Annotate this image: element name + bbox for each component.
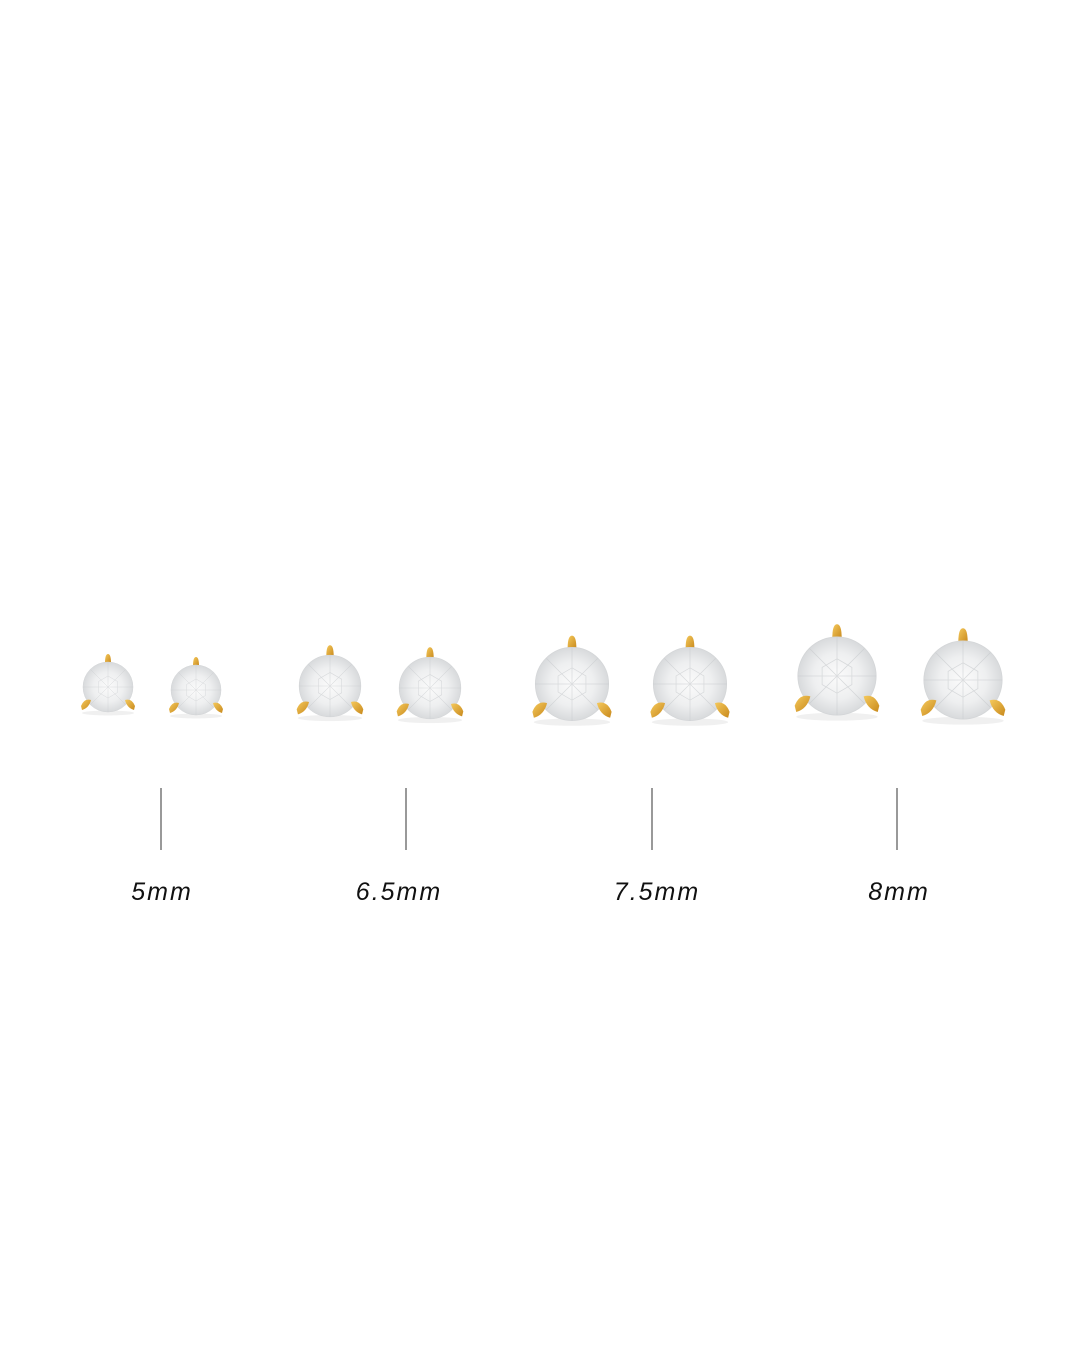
label: 7.5mm: 7.5mm bbox=[614, 878, 700, 906]
label: 5mm: 5mm bbox=[131, 878, 193, 906]
marker line: 6.5mm bbox=[405, 788, 407, 850]
label: 8mm: 8mm bbox=[868, 878, 930, 906]
earrings: 8mm bbox=[795, 624, 1005, 725]
marker line: 8mm bbox=[896, 788, 898, 850]
marker line: 7.5mm bbox=[651, 788, 653, 850]
earrings: 5mm bbox=[81, 654, 223, 718]
earrings: 7.5mm bbox=[532, 636, 730, 726]
earrings: 6.5mm bbox=[297, 645, 463, 723]
marker line: 5mm bbox=[160, 788, 162, 850]
label: 6.5mm: 6.5mm bbox=[356, 878, 442, 906]
